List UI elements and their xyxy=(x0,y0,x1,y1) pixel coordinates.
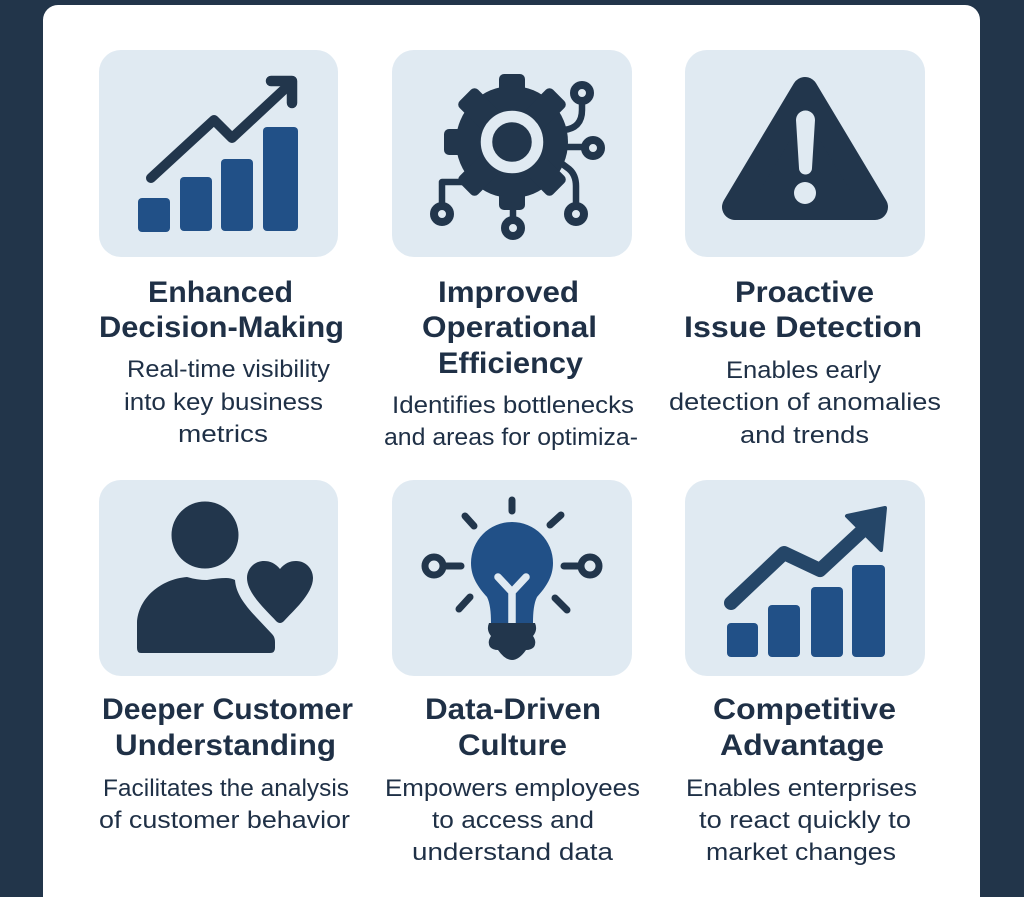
heading: Decision-Making xyxy=(99,311,344,344)
heading: Deeper Customer xyxy=(102,693,353,726)
heading: Culture xyxy=(458,729,567,762)
icon: bar chart with bold arrow xyxy=(727,508,885,657)
icon tile xyxy=(392,480,632,676)
panel: enhanced decision-making xyxy=(99,50,344,448)
icon: light bulb xyxy=(425,500,599,660)
panel: competitive advantage xyxy=(685,480,925,866)
description: Facilitates the analysis xyxy=(103,775,349,802)
description: metrics xyxy=(178,421,268,448)
description: detection of anomalies xyxy=(669,389,941,416)
description: of customer behavior xyxy=(99,807,350,834)
icon tile xyxy=(99,480,338,676)
heading: Issue Detection xyxy=(684,311,922,344)
heading xyxy=(422,276,597,380)
description: and areas for optimiza- xyxy=(384,424,638,451)
heading xyxy=(425,693,601,762)
icon: person with heart xyxy=(137,502,313,653)
heading: Operational xyxy=(422,311,597,344)
heading: Understanding xyxy=(115,729,336,762)
heading xyxy=(99,276,344,344)
heading xyxy=(102,693,353,762)
icon: gear with circuit nodes xyxy=(434,74,601,236)
description: Empowers employees xyxy=(385,775,640,802)
panel: proactive issue detection xyxy=(669,50,941,449)
description: Real-time visibility xyxy=(127,356,331,383)
description xyxy=(669,357,941,449)
description: into key business xyxy=(124,389,323,416)
icon tile xyxy=(685,50,925,257)
description: understand data xyxy=(412,839,613,866)
description: Identifies bottlenecks xyxy=(392,392,634,419)
description xyxy=(384,392,638,451)
heading: Proactive xyxy=(735,276,874,309)
heading xyxy=(713,693,896,762)
description xyxy=(385,775,640,866)
icon tile xyxy=(685,480,925,676)
description: to access and xyxy=(432,807,594,834)
description: to react quickly to xyxy=(699,807,911,834)
heading: Competitive xyxy=(713,693,896,726)
description: Enables early xyxy=(726,357,882,384)
panel: data-driven culture xyxy=(385,480,640,866)
description xyxy=(686,775,917,866)
icon: warning triangle xyxy=(735,90,875,207)
description: and trends xyxy=(740,422,869,449)
heading: Advantage xyxy=(720,729,884,762)
heading xyxy=(684,276,922,344)
icon tile xyxy=(99,50,338,257)
description xyxy=(99,775,350,834)
description: market changes xyxy=(706,839,896,866)
icon: bar chart with arrow xyxy=(138,81,298,232)
panel: improved operational efficiency xyxy=(384,50,638,451)
heading: Efficiency xyxy=(438,347,583,380)
heading: Enhanced xyxy=(148,276,293,309)
description: Enables enterprises xyxy=(686,775,917,802)
heading: Data-Driven xyxy=(425,693,601,726)
panel: deeper customer understanding xyxy=(99,480,353,834)
heading: Improved xyxy=(438,276,579,309)
icon tile xyxy=(392,50,632,257)
description xyxy=(124,356,331,448)
